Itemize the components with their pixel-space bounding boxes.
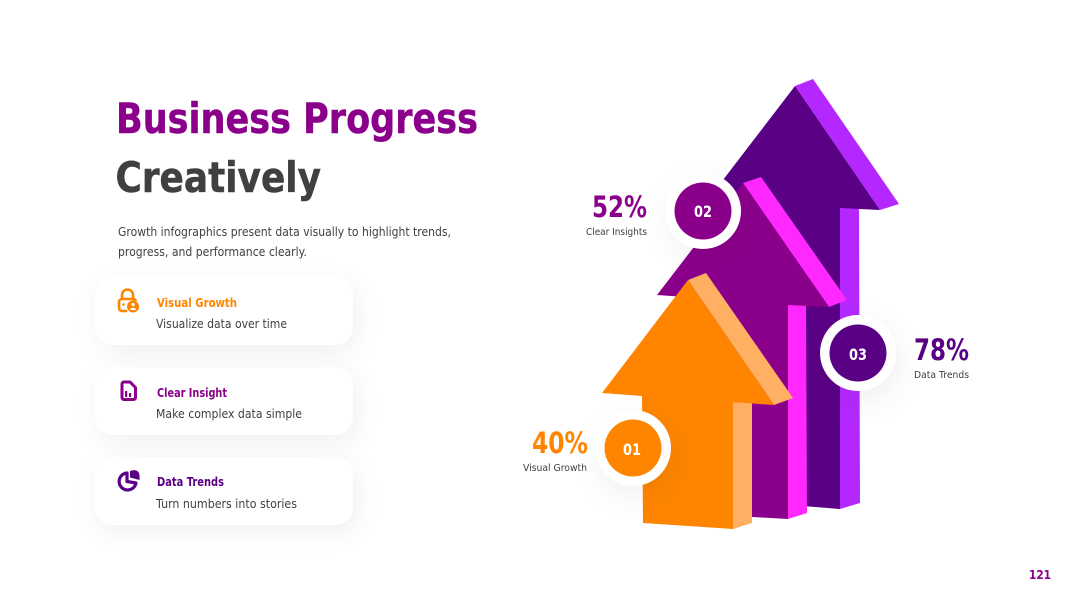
icon: document chart bbox=[122, 382, 136, 400]
card description: Make complex data simple bbox=[156, 407, 302, 421]
title: Business Progress bbox=[116, 94, 478, 143]
card heading: Clear Insight bbox=[157, 386, 227, 400]
arrow 02: magenta bbox=[657, 177, 847, 519]
title: Creatively bbox=[116, 153, 321, 202]
icon: pie chart bbox=[119, 470, 140, 490]
badge 01 bbox=[595, 410, 671, 486]
card heading: Data Trends bbox=[157, 475, 224, 489]
card description: Visualize data over time bbox=[156, 317, 287, 331]
stat: 52%: 52% bbox=[592, 190, 647, 224]
stat: 78% bbox=[914, 333, 969, 381]
arrow 03: indigo bbox=[700, 79, 899, 509]
stat: 52% bbox=[586, 190, 647, 238]
intro text bbox=[118, 224, 451, 259]
title bbox=[116, 94, 478, 202]
badge 03: 03 bbox=[849, 345, 867, 364]
intro text: Growth infographics present data visually to highlight trends, bbox=[118, 224, 451, 239]
stat: 40%: 40% bbox=[532, 426, 588, 460]
stat: 78%: 78% bbox=[914, 333, 969, 367]
icon: lock with user bbox=[119, 290, 139, 312]
card: Visual Growth bbox=[95, 277, 353, 345]
stat: 52%: Clear Insights bbox=[586, 227, 647, 238]
card description: Turn numbers into stories bbox=[155, 497, 297, 511]
card: Data Trends bbox=[95, 457, 353, 525]
badge 01: 01 bbox=[623, 440, 641, 459]
intro text: progress, and performance clearly. bbox=[118, 244, 307, 259]
stat: 78%: Data Trends bbox=[914, 370, 969, 381]
stat: 40%: Visual Growth bbox=[523, 463, 587, 474]
arrow 01: orange bbox=[602, 273, 793, 529]
page number: 121 bbox=[1029, 568, 1051, 582]
badge 02 bbox=[665, 173, 741, 249]
stat: 40% bbox=[523, 426, 588, 474]
card heading: Visual Growth bbox=[157, 296, 237, 310]
card: Clear Insight bbox=[95, 367, 353, 435]
badge 03 bbox=[820, 315, 896, 391]
badge 02: 02 bbox=[694, 202, 712, 221]
